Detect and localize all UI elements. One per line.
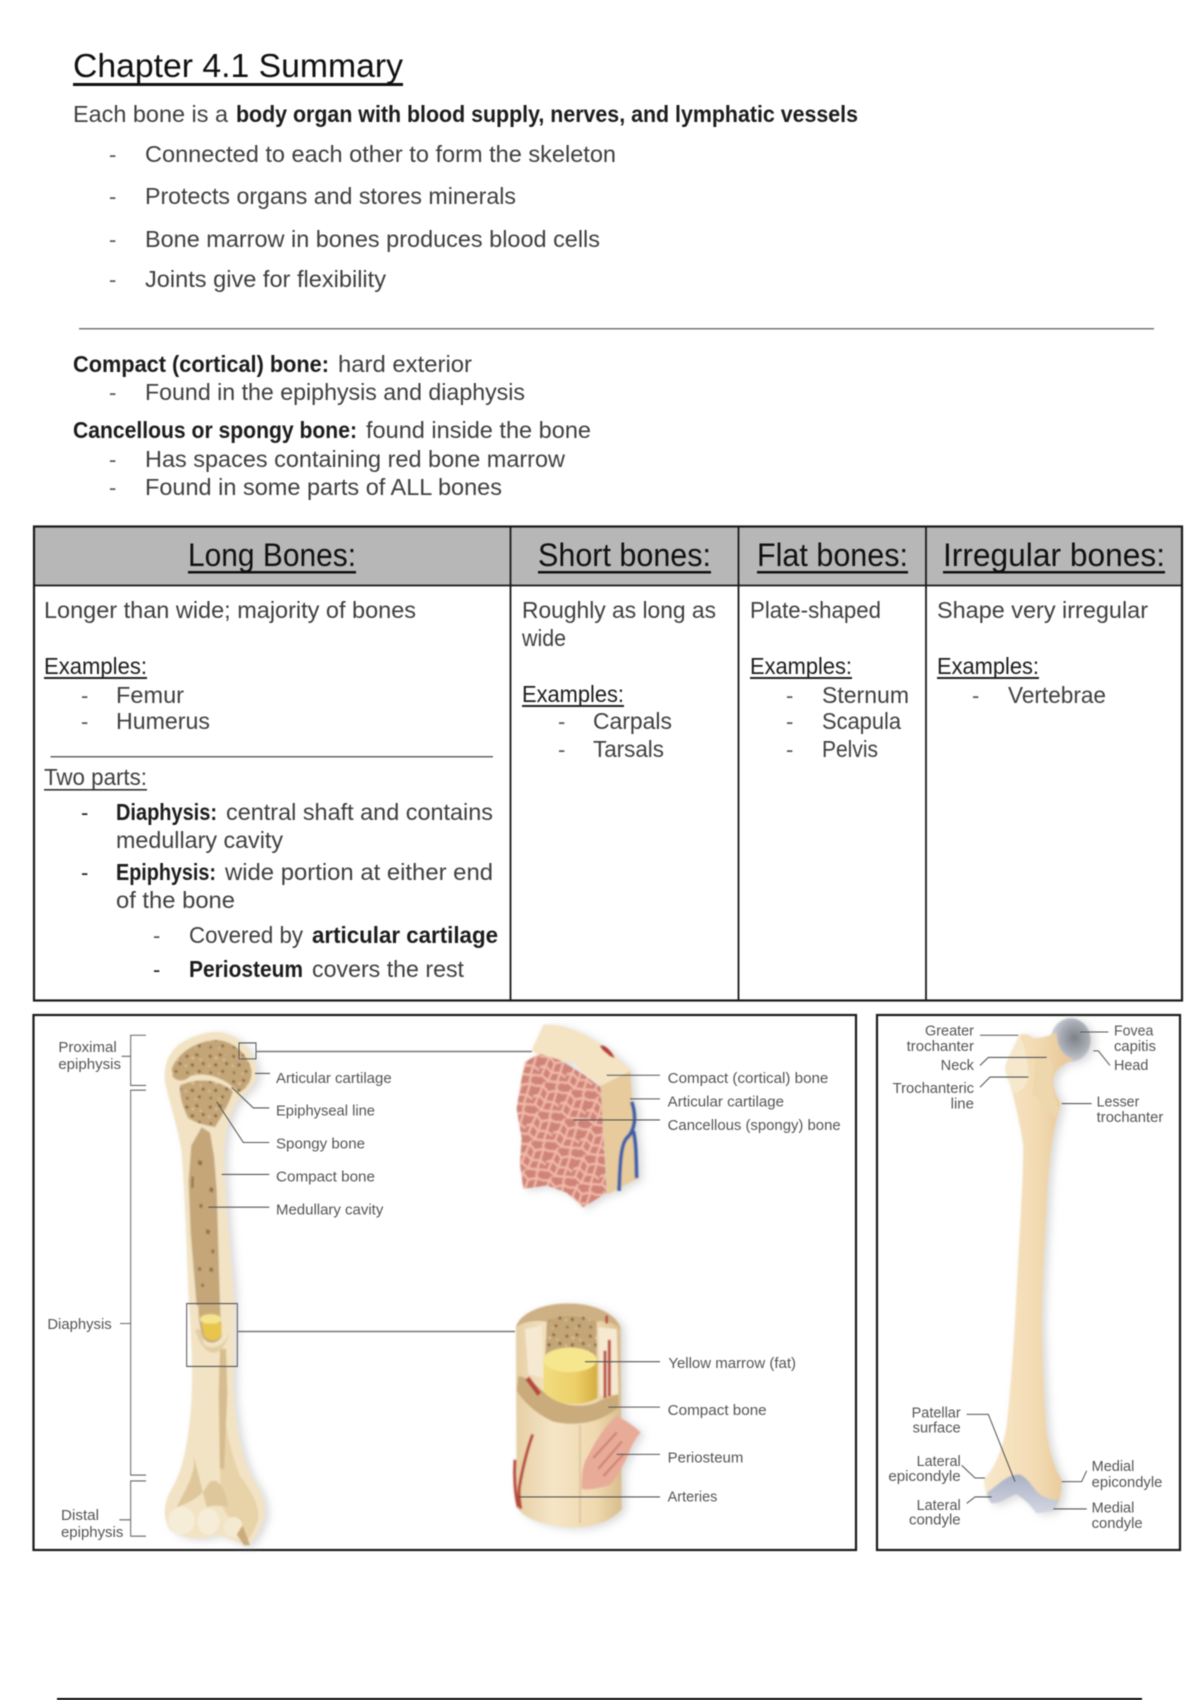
column: long bones: of the bone — [116, 887, 235, 913]
femur labels: Lesser — [1097, 1093, 1140, 1110]
condyles — [168, 1507, 195, 1534]
bone shape — [165, 1032, 265, 1545]
compact ring — [517, 1376, 618, 1424]
column: long bones: articular cartilage — [312, 922, 498, 948]
femur labels — [888, 1022, 1164, 1531]
title: Chapter 4.1 Summary — [73, 47, 403, 84]
femur labels: Medial — [1092, 1499, 1134, 1516]
text block: compact and cancellous bone: - — [109, 475, 116, 500]
bullet list: bone functions — [109, 141, 616, 292]
column: flat bones: Examples: — [750, 653, 852, 679]
yellow marrow window — [195, 1305, 229, 1353]
column: long bones: - — [81, 683, 88, 708]
humerus labels and brackets: epiphysis — [61, 1523, 123, 1540]
cylinder body — [516, 1304, 622, 1527]
femur labels: Patellar — [912, 1404, 961, 1420]
column: short bones: Tarsals — [593, 736, 664, 762]
table header row: Irregular bones: — [943, 537, 1165, 573]
column: long bones: Femur — [116, 682, 184, 708]
femur labels: Head — [1114, 1057, 1148, 1073]
humerus labels and brackets: Diaphysis — [47, 1315, 112, 1332]
cartilage top — [532, 1025, 631, 1085]
inner spongy — [545, 1315, 597, 1364]
diagram: humerus — [165, 1032, 265, 1545]
arteries — [605, 1340, 609, 1398]
column: long bones: Periosteum — [189, 956, 303, 982]
femur labels: line — [951, 1095, 974, 1111]
diaphysis detail labels: Compact bone — [668, 1402, 767, 1418]
column: long bones: - — [81, 860, 88, 885]
humerus labels and brackets: Proximal — [58, 1038, 117, 1055]
column: irregular bones: - — [972, 683, 979, 708]
spongy bone labels — [573, 1069, 841, 1133]
table header row: Flat bones: — [757, 537, 908, 573]
text block: compact and cancellous bone: Found in the epiphysis and diaphysis — [145, 379, 525, 405]
text block: compact and cancellous bone: Has spaces containing red bone marrow — [145, 446, 565, 472]
text block: compact and cancellous bone: found inside the bone — [366, 417, 591, 443]
text block: compact and cancellous bone: Cancellous or spongy bone: — [73, 417, 357, 443]
column: long bones — [44, 597, 498, 982]
humerus labels and brackets: Compact bone — [276, 1168, 375, 1185]
text block: bone overview — [73, 101, 858, 292]
bullet list: bone functions: Bone marrow in bones produces blood cells — [145, 226, 600, 252]
femur labels: surface — [913, 1419, 961, 1436]
column: long bones: Humerus — [116, 708, 210, 734]
column: short bones: Carpals — [593, 708, 672, 734]
text block: compact and cancellous bone: Compact (cortical) bone: — [73, 351, 329, 377]
humerus labels and brackets — [47, 1035, 392, 1540]
bone shape — [984, 1033, 1074, 1513]
bullet list: bone functions: Joints give for flexibility — [145, 266, 387, 292]
compact side — [601, 1069, 638, 1194]
column: flat bones: Plate-shaped — [750, 597, 881, 623]
column: short bones: Examples: — [522, 681, 624, 707]
column: long bones: - — [153, 923, 160, 948]
diagram: spongy bone detail — [517, 1025, 638, 1207]
condyle cartilage — [987, 1474, 1059, 1513]
column: irregular bones: Vertebrae — [1008, 682, 1106, 708]
column: long bones: - — [81, 800, 88, 825]
top rim — [516, 1304, 621, 1329]
humerus labels and brackets: Distal — [61, 1506, 99, 1523]
bullet list: bone functions: - — [109, 227, 116, 252]
column: irregular bones — [937, 597, 1148, 708]
column: flat bones: Sternum — [822, 682, 909, 708]
femur labels: Lateral — [917, 1496, 961, 1513]
femoral head — [1051, 1018, 1091, 1062]
table: bone types — [34, 526, 1182, 1000]
column: long bones: Epiphysis: — [116, 859, 216, 885]
column: irregular bones: Shape very irregular — [937, 597, 1148, 623]
femur labels: Lateral — [917, 1452, 961, 1469]
column: long bones: medullary cavity — [116, 827, 284, 853]
column: long bones: Two parts: — [44, 764, 147, 790]
column: short bones: wide — [521, 625, 566, 651]
table header row: Short bones: — [538, 537, 711, 573]
bullet list: bone functions: Protects organs and stores minerals — [145, 183, 516, 209]
spongy bone labels: Cancellous (spongy) bone — [668, 1117, 841, 1133]
column: long bones: Covered by — [189, 922, 303, 948]
column: flat bones: - — [786, 683, 793, 708]
column: long bones: central shaft and contains — [226, 799, 493, 825]
column: short bones: - — [558, 737, 565, 762]
footer rule — [57, 1698, 1142, 1700]
column: long bones: - — [153, 957, 160, 982]
medullary cavity — [189, 1127, 220, 1305]
femur labels: Greater — [925, 1022, 974, 1039]
spongy head — [172, 1040, 252, 1093]
column: short bones: - — [558, 709, 565, 734]
spongy lattice — [517, 1054, 607, 1207]
diaphysis detail labels: Periosteum — [668, 1449, 743, 1465]
panel: long bone anatomy — [34, 1015, 856, 1550]
text block: compact and cancellous bone: - — [109, 447, 116, 472]
femur labels: condyle — [909, 1511, 961, 1528]
column: flat bones: - — [786, 737, 793, 762]
intro sentence: body organ with blood supply, nerves, and lymphatic vessels — [236, 101, 858, 127]
spongy bone labels: Compact (cortical) bone — [668, 1069, 829, 1086]
table header row — [34, 526, 1182, 585]
femur labels: trochanter — [1097, 1108, 1164, 1125]
panel: femur anatomy — [877, 1015, 1180, 1550]
bullet list: bone functions: Connected to each other to form the skeleton — [145, 141, 616, 167]
column: long bones: Longer than wide; majority of bones — [44, 597, 416, 623]
femur labels: capitis — [1114, 1037, 1156, 1054]
text block: compact and cancellous bone: hard exterior — [338, 351, 472, 377]
humerus labels and brackets: epiphysis — [58, 1056, 121, 1072]
text block: compact and cancellous bone — [73, 351, 591, 500]
column: long bones: wide portion at either end — [224, 859, 493, 885]
column: short bones: Roughly as long as — [522, 597, 716, 623]
table header row: Long Bones: — [188, 537, 356, 573]
diagram: diaphysis detail — [515, 1304, 641, 1527]
femur labels: Medial — [1092, 1458, 1134, 1474]
diaphysis detail labels: Arteries — [668, 1488, 717, 1505]
femur labels: condyle — [1092, 1514, 1143, 1531]
diaphysis detail labels: Yellow marrow (fat) — [668, 1354, 796, 1371]
text block: compact and cancellous bone: - — [109, 380, 116, 405]
column: long bones: - — [81, 709, 88, 734]
bullet list: bone functions: - — [109, 184, 116, 209]
column: long bones: covers the rest — [312, 956, 465, 982]
yellow marrow — [543, 1360, 597, 1404]
column: long bones: Examples: — [44, 653, 147, 679]
column: short bones — [521, 597, 716, 762]
diaphysis detail labels — [518, 1354, 796, 1505]
intro sentence: Each bone is a — [73, 101, 228, 127]
humerus labels and brackets: Epiphyseal line — [276, 1102, 375, 1119]
bullet list: bone functions: - — [109, 267, 116, 292]
humerus labels and brackets: Medullary cavity — [276, 1201, 383, 1218]
humerus labels and brackets: Articular cartilage — [276, 1069, 392, 1086]
femur labels: Fovea — [1114, 1022, 1154, 1039]
femur labels: epicondyle — [888, 1467, 961, 1484]
humerus labels and brackets: Spongy bone — [276, 1135, 365, 1151]
bullet list: bone functions: - — [109, 142, 116, 167]
femur labels: Trochanteric — [893, 1080, 974, 1096]
column: long bones: Diaphysis: — [116, 799, 217, 825]
column: flat bones: Pelvis — [822, 736, 878, 762]
spongy bone labels: Articular cartilage — [668, 1093, 784, 1110]
column: flat bones: - — [786, 709, 793, 734]
vein — [619, 1102, 637, 1191]
periosteum flap — [582, 1416, 641, 1489]
femur labels: trochanter — [907, 1037, 974, 1054]
text block: compact and cancellous bone: Found in some parts of ALL bones — [145, 474, 502, 500]
femur labels: epicondyle — [1092, 1474, 1163, 1490]
column: flat bones: Scapula — [822, 708, 901, 734]
diagram: femur — [984, 1018, 1091, 1513]
column: flat bones — [750, 597, 909, 762]
column: irregular bones: Examples: — [937, 653, 1039, 679]
femur labels: Neck — [941, 1057, 974, 1073]
